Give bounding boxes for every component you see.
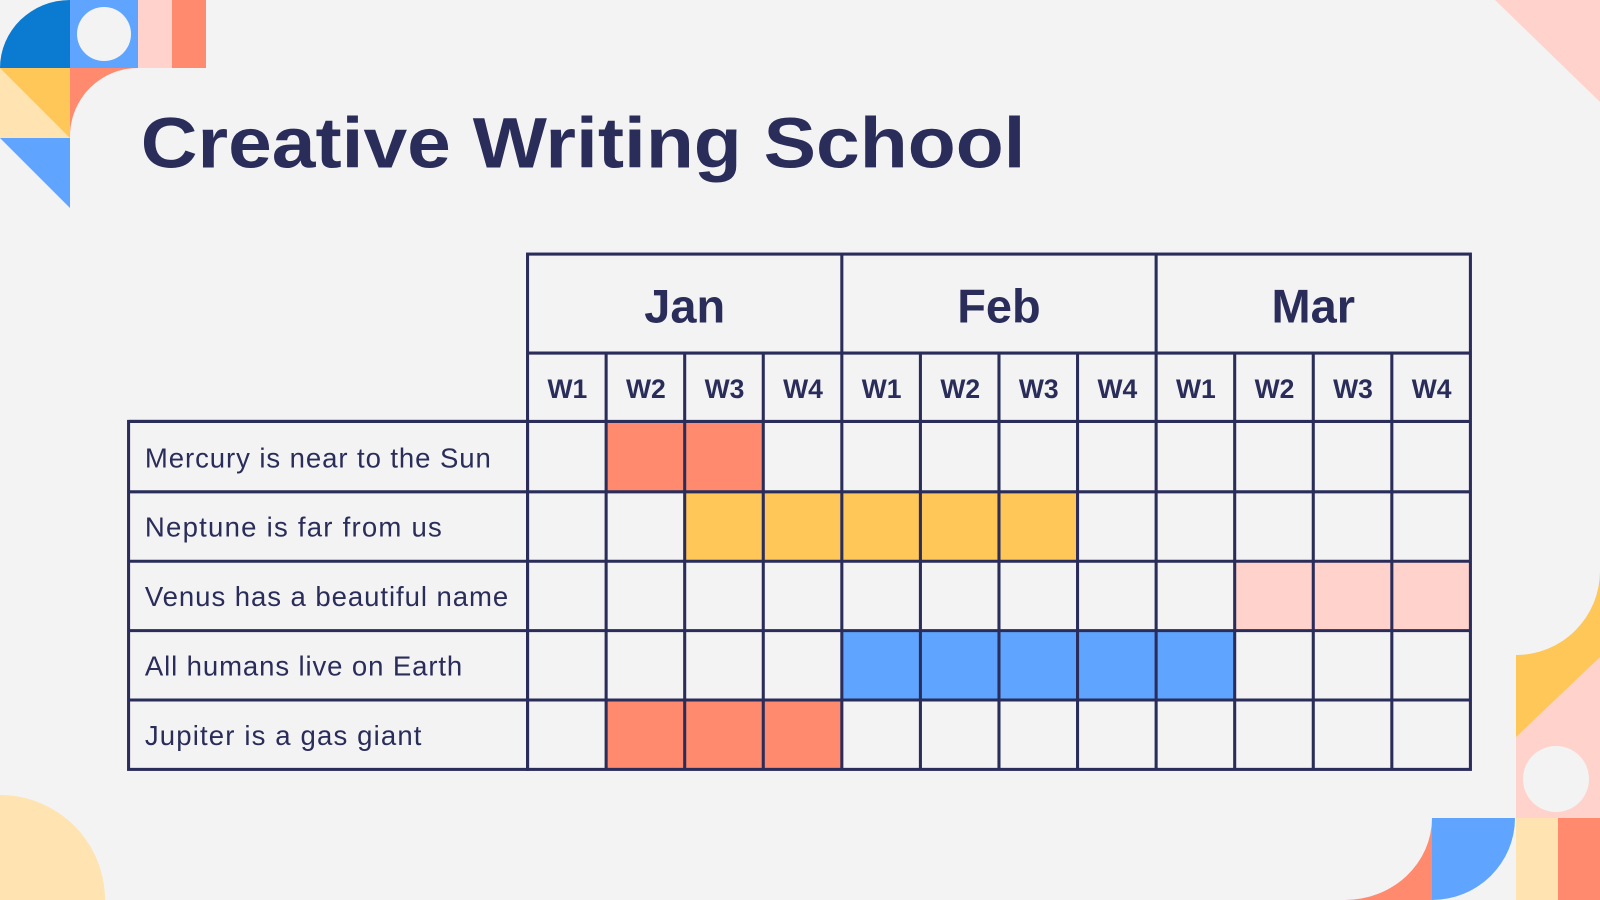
month headers: Feb — [957, 280, 1041, 332]
title: Creative Writing School — [141, 103, 1026, 183]
decoration: top-right triangle — [1495, 0, 1600, 102]
week headers: W1 — [547, 374, 587, 404]
row labels: Neptune is far from us — [145, 512, 442, 543]
week headers: W1 — [1176, 374, 1216, 404]
gantt table — [129, 254, 1470, 769]
month headers: Mar — [1272, 280, 1355, 332]
row labels: Jupiter is a gas giant — [145, 720, 422, 751]
row labels: All humans live on Earth — [145, 651, 462, 682]
week headers: W1 — [862, 374, 902, 404]
row labels: Mercury is near to the Sun — [145, 442, 491, 473]
month headers: Jan — [644, 280, 725, 332]
week headers: W3 — [1019, 374, 1059, 404]
week headers: W2 — [1255, 374, 1294, 404]
week headers: W2 — [626, 374, 666, 404]
week headers — [547, 374, 1452, 404]
bar fills — [606, 421, 1470, 769]
row labels — [145, 442, 508, 751]
week headers: W2 — [940, 374, 980, 404]
month headers — [644, 280, 1355, 332]
decoration: top-left shapes — [0, 0, 206, 208]
row labels: Venus has a beautiful name — [145, 581, 508, 612]
week headers: W3 — [1333, 374, 1373, 404]
week headers: W4 — [1097, 374, 1137, 404]
week headers: W3 — [705, 374, 744, 404]
week headers: W4 — [783, 374, 823, 404]
week headers: W4 — [1412, 374, 1452, 404]
decoration: bottom-right shapes — [1345, 571, 1600, 900]
decoration: bottom-left quarter circle — [0, 795, 105, 900]
